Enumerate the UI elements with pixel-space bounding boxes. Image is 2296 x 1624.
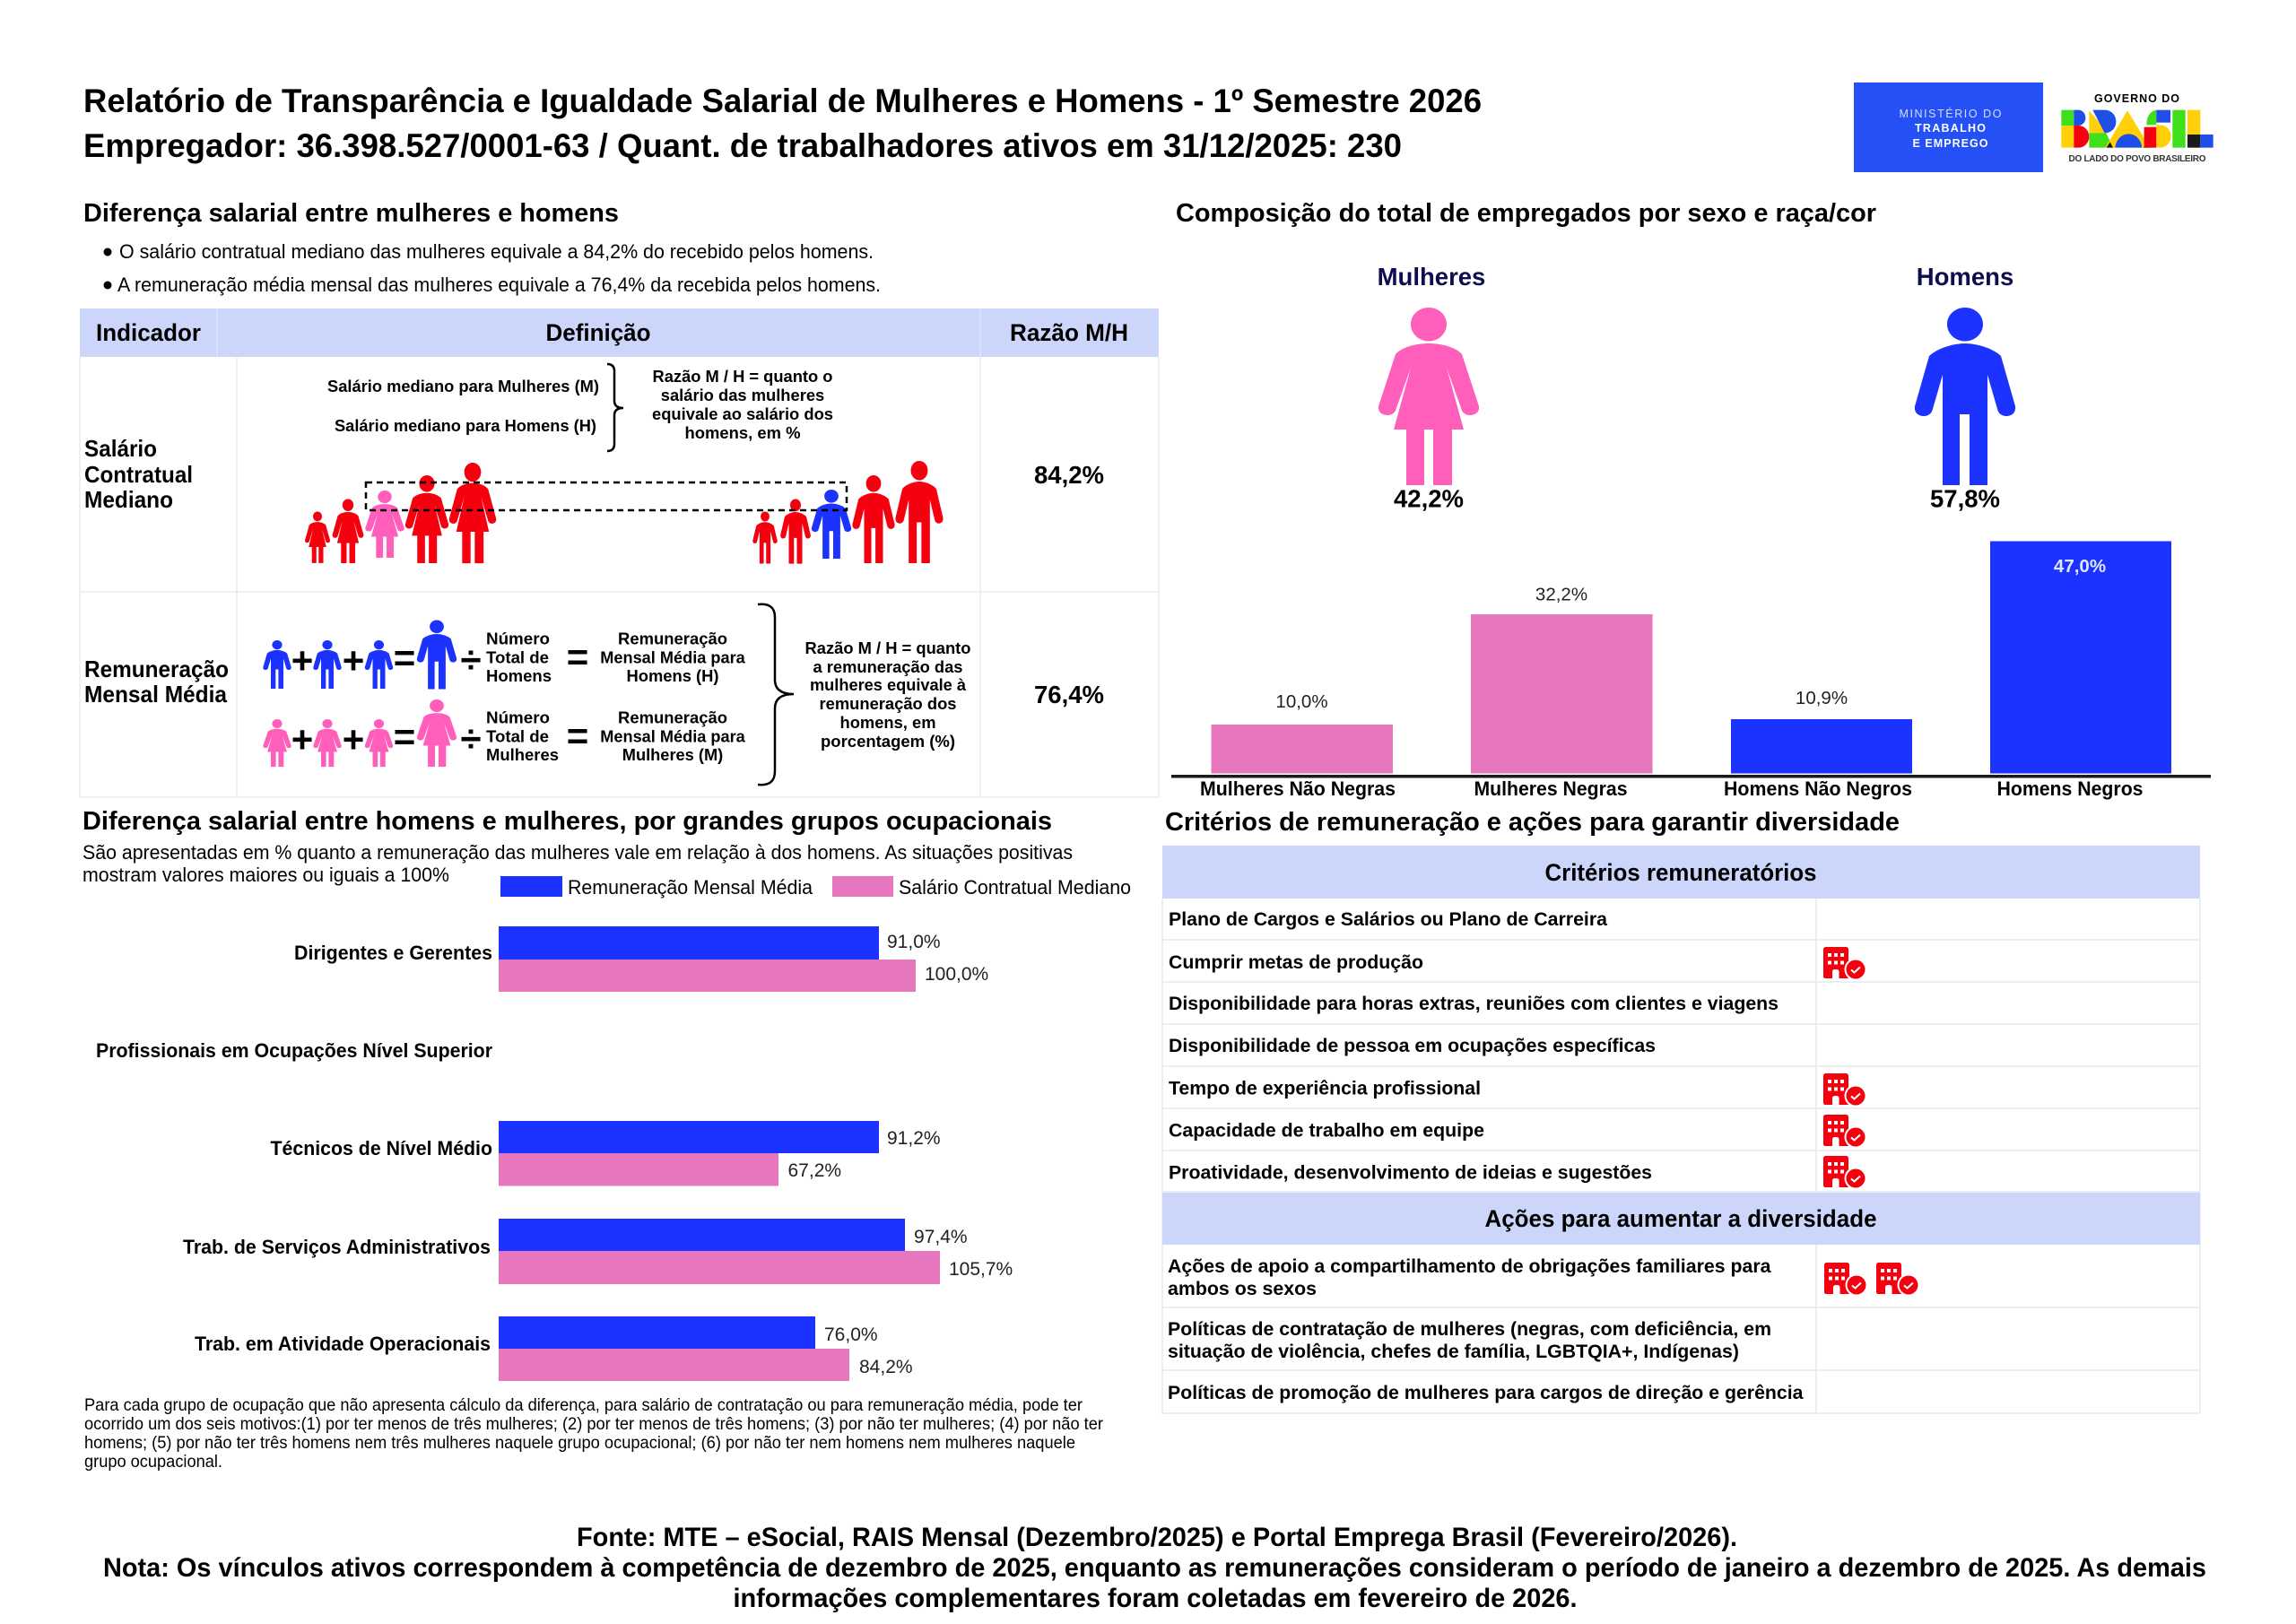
bar chart: composition by sex and race: Homens Não Negros (1724, 777, 1912, 800)
ratio definition: a remuneração das (813, 658, 963, 676)
panel: men share (1915, 263, 2015, 513)
bar chart: composition by sex and race: Mulheres Não Negras (1200, 777, 1396, 800)
group: Técnicos de Nível Médio: 91,2% (887, 1128, 941, 1149)
bullet summary text: O salário contratual mediano das mulheres equivale a 84,2% do recebido pelos homens. (119, 240, 874, 263)
panel: criteria table (1162, 846, 2200, 1413)
group: Dirigentes e Gerentes: 91,0% (887, 932, 941, 952)
header: Ações para aumentar a diversidade: Ações para aumentar a diversidade (1485, 1205, 1876, 1232)
brace (607, 364, 623, 451)
description text: mostram valores maiores ou iguais a 100% (83, 864, 449, 886)
panel: women share (1378, 263, 1485, 513)
row: Remuneração Mensal Média: Remuneração (84, 656, 229, 682)
women formula: = (394, 716, 415, 758)
men formula: Remuneração (618, 630, 727, 647)
men formula: + (291, 639, 313, 682)
group: Técnicos de Nível Médio: 67,2% (787, 1160, 841, 1181)
definition text: equivale ao salário dos (652, 404, 833, 423)
bullet summary text: A remuneração média mensal das mulheres equivale a 76,4% da recebida pelos homens. (117, 274, 881, 296)
row: Salário Contratual Mediano: Mediano (84, 486, 173, 513)
footer: source and note: Nota: Os vínculos ativos correspondem à competência de dezembro de 2025, enquanto as remunerações consideram o período de janeiro a dezembro de 2025. As demais (103, 1553, 2206, 1583)
legend (500, 876, 1131, 899)
logo: Ministério do Trabalho e Emprego (1854, 83, 2043, 172)
header: Critérios remuneratórios (1162, 846, 2200, 899)
women formula: + (343, 718, 364, 760)
group: Trab. em Atividade Operacionais: 76,0% (824, 1324, 878, 1345)
panel: indicator table (80, 308, 1159, 797)
men formula: Mensal Média para (600, 649, 746, 667)
criteria rows: Plano de Cargos e Salários ou Plano de Carreira (1169, 908, 1608, 930)
ratio definition: mulheres equivale à (810, 676, 967, 694)
row: Salário Contratual Mediano: Salário (84, 435, 157, 462)
group: Trab. em Atividade Operacionais: Trab. em Atividade Operacionais (195, 1333, 491, 1355)
women formula: Mensal Média para (600, 728, 746, 746)
panel: men share: 57,8% (1930, 484, 2000, 513)
group: Dirigentes e Gerentes: 100,0% (925, 964, 988, 985)
icons: criteria adopted (1823, 947, 1867, 1189)
definition text: Razão M / H = quanto o (653, 367, 832, 386)
criteria rows (1169, 908, 1779, 1184)
action rows: Ações de apoio a compartilhamento de obrigações familiares para (1168, 1255, 1772, 1277)
ratio definition: porcentagem (%) (821, 733, 955, 751)
title: Relatório de Transparência e Igualdade Salarial de Mulheres e Homens - 1º Semestre 2026 (83, 83, 1482, 119)
panel: women share: 42,2% (1394, 484, 1464, 513)
table header: Definição (545, 319, 651, 346)
women formula: Mulheres (M) (622, 746, 723, 764)
logo: Governo do Brasil (2061, 92, 2213, 164)
row: Salário Contratual Mediano: Salário mediano para Homens (H) (335, 416, 596, 435)
value 76,4%: 76,4% (1034, 681, 1104, 708)
group: Trab. de Serviços Administrativos: Trab. de Serviços Administrativos (183, 1236, 491, 1258)
men formula: = (567, 636, 588, 678)
header: Ações para aumentar a diversidade (1162, 1193, 2200, 1245)
women formula: Total de (486, 728, 549, 746)
heading: criteria and actions: Critérios de remuneração e ações para garantir diversidade (1165, 808, 1900, 837)
action rows: Políticas de contratação de mulheres (negras, com deficiência, em (1168, 1318, 1771, 1340)
icons: actions adopted (1824, 1263, 1919, 1297)
group: Técnicos de Nível Médio (271, 1121, 941, 1185)
panel: men share: Homens (1917, 263, 2013, 291)
group: Trab. em Atividade Operacionais (195, 1316, 913, 1381)
bar chart: composition by sex and race: Homens Negros (1996, 777, 2144, 800)
definition text (652, 367, 833, 442)
women formula: Remuneração (618, 708, 727, 726)
men formula (263, 621, 746, 690)
logo: Ministério do Trabalho e Emprego: TRABALHO (1915, 122, 1986, 135)
logo: Governo do Brasil: GOVERNO DO (2094, 92, 2179, 105)
men formula: ÷ (460, 638, 482, 681)
heading: occupational groups: Diferença salarial entre homens e mulheres, por grandes grupos ocupacionais (83, 807, 1052, 836)
ratio definition: remuneração dos (820, 695, 956, 713)
footer: source and note: informações complementares foram coletadas em fevereiro de 2026. (734, 1584, 1577, 1613)
action rows: Políticas de promoção de mulheres para cargos de direção e gerência (1168, 1382, 1805, 1403)
bar chart: occupational groups (96, 926, 1013, 1381)
action rows: ambos os sexos (1168, 1278, 1317, 1299)
group: Dirigentes e Gerentes (294, 926, 988, 992)
table header: Razão M/H (1010, 319, 1128, 346)
ratio definition (805, 639, 971, 751)
row: Salário Contratual Mediano: Salário mediano para Mulheres (M) (327, 377, 599, 395)
group: Técnicos de Nível Médio: Técnicos de Nível Médio (271, 1137, 492, 1159)
women formula: + (291, 718, 313, 760)
row: Salário Contratual Mediano: Contratual (84, 461, 193, 488)
description text: São apresentadas em % quanto a remuneração das mulheres vale em relação à dos homens. As situações positivas (83, 841, 1073, 864)
action rows: situação de violência, chefes de família, LGBTQIA+, Indígenas) (1168, 1341, 1739, 1362)
bar chart: composition by sex and race: 32,2% (1535, 585, 1587, 604)
men formula: Homens (H) (626, 667, 719, 685)
heading: composition: Composição do total de empregados por sexo e raça/cor (1176, 199, 1876, 228)
bar chart: composition by sex and race: 10,9% (1796, 688, 1848, 708)
group: Trab. de Serviços Administrativos: 97,4% (914, 1227, 968, 1247)
women formula (263, 699, 746, 767)
women formula: ÷ (460, 717, 482, 760)
men figures (752, 461, 944, 564)
group: Trab. em Atividade Operacionais: 84,2% (859, 1357, 913, 1377)
footnote: grupo ocupacional. (84, 1452, 222, 1472)
criteria rows: Disponibilidade para horas extras, reuniões com clientes e viagens (1169, 993, 1779, 1014)
row: Salário Contratual Mediano (84, 364, 1104, 564)
footnote: Para cada grupo de ocupação que não apresenta cálculo da diferença, para salário de contratação ou para remuneração média, pode ter (84, 1395, 1083, 1415)
action rows (1168, 1255, 1805, 1403)
bullet summary text (104, 240, 881, 296)
heading: Diferença salarial entre mulheres e homens: Diferença salarial entre mulheres e homens (83, 199, 619, 228)
criteria rows: Cumprir metas de produção (1169, 951, 1423, 973)
bar chart: composition by sex and race (1171, 542, 2211, 800)
men formula: Total de (486, 649, 549, 667)
ratio definition: Razão M / H = quanto (805, 639, 971, 657)
footer: source and note (103, 1523, 2206, 1613)
value 84,2%: 84,2% (1034, 461, 1104, 489)
dashed median link (366, 482, 847, 510)
title: Empregador: 36.398.527/0001-63 / Quant. de trabalhadores ativos em 31/12/2025: 230 (83, 127, 1402, 164)
men formula: + (343, 639, 364, 682)
bar chart: composition by sex and race: Mulheres Negras (1474, 777, 1627, 800)
bar chart: composition by sex and race: 47,0% (2054, 556, 2106, 577)
legend: Remuneração Mensal Média (568, 876, 813, 899)
criteria rows: Proatividade, desenvolvimento de ideias e sugestões (1169, 1162, 1652, 1184)
legend: Salário Contratual Mediano (899, 876, 1131, 899)
group: Trab. de Serviços Administrativos (183, 1219, 1013, 1284)
group: Profissionais em Ocupações Nível Superior: Profissionais em Ocupações Nível Superior (96, 1039, 492, 1062)
criteria rows: Tempo de experiência profissional (1169, 1078, 1481, 1099)
women figures (305, 463, 496, 563)
definition text: salário das mulheres (661, 386, 824, 404)
footnote: ocorrido um dos seis motivos:(1) por ter menos de três mulheres; (2) por ter menos de três homens; (3) por não ter mulheres; (4) por não ter (84, 1414, 1103, 1434)
men formula: Homens (486, 667, 552, 685)
logo: Ministério do Trabalho e Emprego: E EMPREGO (1912, 137, 1988, 150)
men formula: Número (486, 630, 550, 647)
women formula: Mulheres (486, 746, 559, 764)
footer: source and note: Fonte: MTE – eSocial, RAIS Mensal (Dezembro/2025) e Portal Emprega Brasil (Fevereiro/2026). (577, 1523, 1737, 1552)
men formula: = (394, 637, 415, 679)
table header (80, 308, 1159, 357)
women formula: = (567, 715, 588, 757)
large brace (758, 604, 794, 785)
header: Critérios remuneratórios: Critérios remuneratórios (1544, 859, 1817, 886)
criteria rows: Disponibilidade de pessoa em ocupações específicas (1169, 1035, 1656, 1056)
row: Remuneração Mensal Média: Mensal Média (84, 681, 227, 708)
group: Trab. de Serviços Administrativos: 105,7% (949, 1259, 1013, 1280)
title (83, 83, 1482, 164)
logo: Ministério do Trabalho e Emprego: MINISTÉRIO DO (1900, 107, 2002, 120)
footnote: homens; (5) por não ter três homens nem três mulheres naquele grupo ocupacional; (6) por não ter nem homens nem mulheres naquele (84, 1433, 1075, 1453)
logo: Governo do Brasil: DO LADO DO POVO BRASILEIRO (2068, 154, 2206, 164)
panel: women share: Mulheres (1378, 263, 1485, 291)
row: Remuneração Mensal Média (84, 604, 1104, 785)
group: Dirigentes e Gerentes: Dirigentes e Gerentes (294, 942, 492, 964)
ratio definition: homens, em (839, 714, 936, 732)
criteria rows: Capacidade de trabalho em equipe (1169, 1119, 1484, 1141)
icon: woman (1378, 308, 1479, 485)
bar chart: composition by sex and race: 10,0% (1275, 691, 1328, 712)
icon: man (1915, 308, 2015, 485)
definition text: homens, em % (685, 423, 800, 442)
footnote (84, 1395, 1103, 1472)
table header: Indicador (96, 319, 201, 346)
women formula: Número (486, 708, 550, 726)
description text (83, 841, 1073, 886)
